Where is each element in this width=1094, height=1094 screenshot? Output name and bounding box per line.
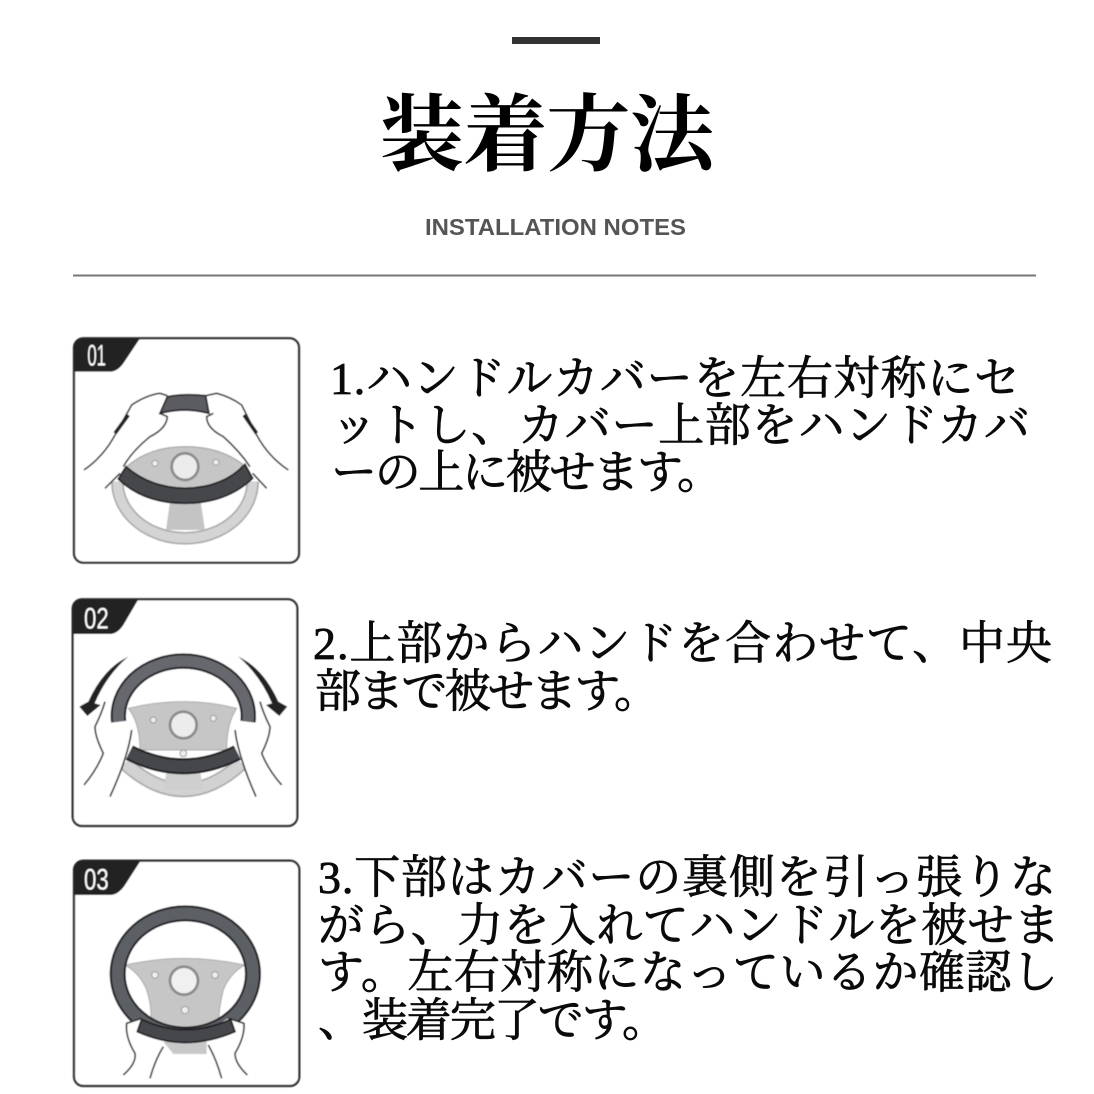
arrow right	[238, 657, 287, 716]
top accent bar	[512, 37, 600, 44]
text block: step 1: ーの上に被せます。	[331, 447, 723, 498]
cover ring	[118, 913, 253, 1035]
panel frame	[74, 861, 299, 1086]
panel: step 3 illustration	[74, 861, 299, 1086]
step badge 02: 02	[84, 602, 109, 635]
text block: step 2: 2.上部からハンドを合わせて、中央	[313, 618, 1052, 669]
text block: step 1	[330, 353, 1030, 498]
cover band bottom	[137, 1019, 235, 1042]
cover band upper	[118, 661, 248, 722]
steering wheel	[125, 958, 245, 1054]
text block: step 3: す。左右対称になっているか確認し	[318, 947, 1058, 998]
hands	[84, 702, 282, 797]
text block: step 3: 、装着完了です。	[318, 995, 668, 1046]
step badge 02	[73, 599, 138, 635]
panel frame	[74, 338, 299, 563]
text block: step 1: ットし、カバー上部をハンドカバ	[331, 400, 1030, 451]
subtitle: INSTALLATION NOTES	[425, 214, 686, 240]
steering wheel	[125, 702, 242, 790]
text block: step 3: 3.下部はカバーの裏側を引っ張りな	[318, 852, 1056, 903]
panel frame	[73, 599, 297, 826]
hands	[84, 393, 288, 488]
step badge 01	[74, 338, 140, 372]
cover band lower	[129, 753, 237, 766]
text block: step 3: がら、力を入れてハンドルを被せま	[318, 900, 1060, 951]
text block: step 3	[318, 852, 1060, 1046]
text block: step 1: 1.ハンドルカバーを左右対称にセ	[330, 353, 1020, 404]
hands	[123, 1018, 247, 1078]
arrow left	[79, 657, 128, 716]
steering wheel	[117, 447, 253, 538]
step badge 01: 01	[87, 339, 106, 372]
cover band top	[160, 395, 209, 413]
panel: step 1 illustration	[74, 338, 299, 563]
panel: step 2 illustration	[73, 599, 297, 826]
cover band lower	[118, 464, 253, 503]
text block: step 2: 部まで被せます。	[315, 666, 660, 717]
text block: step 2	[313, 618, 1052, 717]
step badge 03	[74, 861, 141, 896]
title: 装着方法	[380, 68, 721, 189]
step badge 03: 03	[84, 863, 109, 896]
